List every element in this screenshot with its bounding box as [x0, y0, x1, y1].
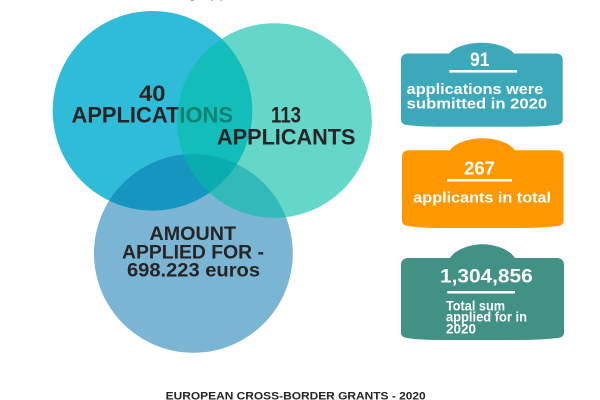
- description: applicants in total: [413, 191, 551, 207]
- circle: applicants: [177, 23, 372, 218]
- label: 40 applications: [72, 81, 233, 128]
- rule: [447, 179, 512, 182]
- card shape: [401, 43, 563, 127]
- card shape: [401, 244, 564, 340]
- label: 40 applications: APPLICATIONS: [72, 103, 233, 128]
- label: amount applied for: [122, 224, 264, 282]
- rule: [447, 291, 515, 294]
- label: 113 applicants: 113: [271, 103, 301, 128]
- description: applications were: [407, 82, 543, 98]
- number: 91: [470, 50, 490, 71]
- label: 40 applications: 40: [139, 81, 166, 106]
- circle: amount applied for: [94, 154, 293, 353]
- stat card: 267 applicants: [402, 138, 564, 228]
- description: 2020: [446, 321, 476, 336]
- number: 267: [464, 158, 495, 178]
- description: Total sum: [446, 298, 505, 313]
- label: amount applied for: 698.223 euros: [127, 261, 260, 282]
- label: 113 applicants: APPLICANTS: [217, 124, 356, 150]
- venn diagram: [53, 11, 372, 353]
- description: submitted in 2020: [407, 96, 547, 112]
- circle: applications: [53, 11, 252, 211]
- card shape: [402, 138, 564, 228]
- description: applied for in: [446, 310, 527, 324]
- number: 1,304,856: [440, 266, 533, 287]
- rule: [449, 70, 517, 73]
- stat card: 1,304,856 total: [401, 244, 564, 340]
- label: 113 applicants: [217, 103, 356, 150]
- stat card: 91 applications: [401, 43, 563, 127]
- label: amount applied for: AMOUNT: [150, 224, 236, 245]
- label: amount applied for: APPLIED FOR -: [122, 242, 264, 263]
